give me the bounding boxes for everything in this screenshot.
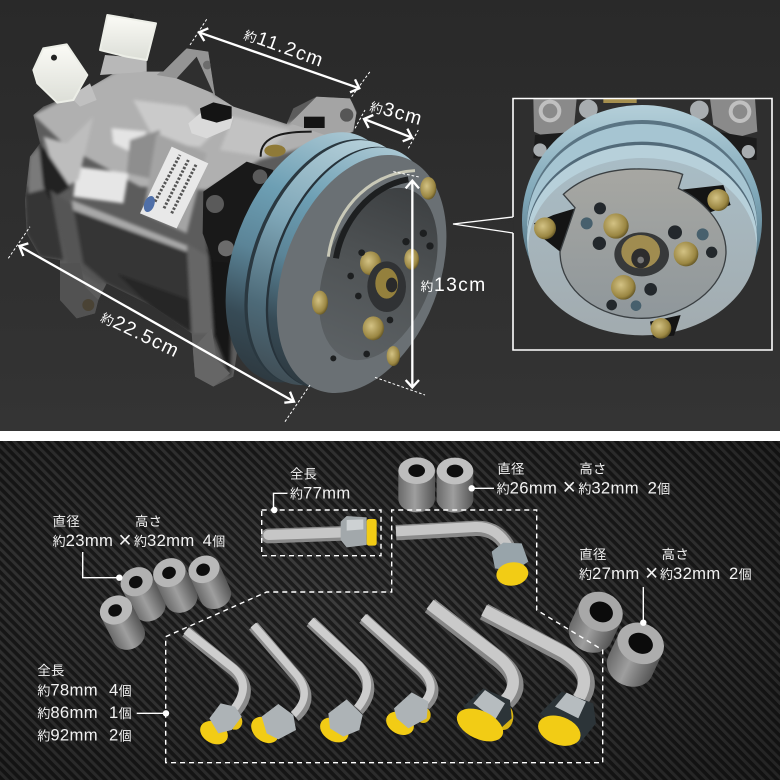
label: sleeves 27mm: 約27mm <box>579 564 640 583</box>
fitting one <box>186 631 245 749</box>
label: sleeves 26mm: 直径 <box>497 458 525 477</box>
brackets <box>533 98 577 138</box>
label: fittings lengths <box>37 660 132 745</box>
bottom carbon panel <box>0 441 780 780</box>
dashed guides <box>8 18 425 422</box>
pulley hub nut <box>367 261 406 312</box>
bent fittings 78 to 92mm <box>186 621 368 749</box>
fitting four <box>363 617 432 740</box>
pulley face <box>245 131 478 417</box>
oil plug <box>188 113 233 138</box>
label: fittings lengths: 2個 <box>109 726 132 745</box>
label: sleeves 27mm: × <box>645 559 658 585</box>
label: sleeves 27mm: 2個 <box>729 564 752 583</box>
mounting foot right <box>192 328 230 387</box>
label: sleeves 26mm: 2個 <box>648 478 670 497</box>
leader lines and dots <box>83 485 646 716</box>
label: fittings lengths: 約92mm <box>37 726 98 745</box>
label: sleeves 26mm: × <box>563 474 576 500</box>
holes <box>581 202 717 311</box>
label: sleeves 27mm <box>579 544 752 585</box>
bent fitting upper <box>396 527 530 588</box>
label: 11.2cm: 約11.2cm <box>241 24 327 72</box>
black notches <box>534 208 575 252</box>
flange <box>528 158 756 335</box>
label: 22.5cm: 約22.5cm <box>97 306 183 362</box>
spec label <box>140 147 208 228</box>
gold rivets <box>534 189 729 339</box>
fitting six <box>484 610 596 751</box>
label: sleeves 23mm: 約23mm <box>53 531 113 550</box>
mounting foot left <box>60 263 98 318</box>
label: sleeves 23mm <box>53 511 225 552</box>
label: sleeves 23mm: 直径 <box>53 511 80 530</box>
arrow: length 22.5cm <box>19 243 294 403</box>
lower panel labels right <box>497 458 752 585</box>
label: sleeves 27mm: 直径 <box>579 544 607 563</box>
fitting five <box>430 604 515 748</box>
fitting three <box>311 621 368 747</box>
connector and wire <box>261 132 312 157</box>
mounting bracket right <box>290 97 357 137</box>
pulley groove two <box>234 123 463 411</box>
label: sleeves 23mm: 約32mm <box>134 531 195 550</box>
label: sleeves 26mm <box>497 458 670 500</box>
small sleeves 23mm <box>95 551 236 655</box>
inset frame <box>513 98 772 350</box>
label: sleeves 23mm: × <box>118 526 132 552</box>
detail inset: clutch face <box>522 99 762 339</box>
dimension labels <box>97 24 487 362</box>
front column <box>187 243 213 333</box>
central hub <box>614 232 669 276</box>
label: sleeves 27mm: 約32mm <box>660 564 721 583</box>
label: sleeves 27mm: 高さ <box>662 544 689 563</box>
label: fittings lengths: 約78mm <box>37 681 98 700</box>
medium sleeves 26mm <box>398 457 473 513</box>
label: sleeves 26mm: 約26mm <box>497 478 557 497</box>
inset background <box>513 98 772 348</box>
label: sleeves 26mm: 約32mm <box>578 478 639 497</box>
label: fittings lengths: 全長 <box>37 660 65 679</box>
pointer to detail inset <box>453 217 513 233</box>
service port caps <box>100 55 147 75</box>
top panel background <box>0 0 780 431</box>
label: fittings lengths: 4個 <box>109 681 132 700</box>
front plate <box>296 171 460 377</box>
label: 13cm: 約13cm <box>421 275 487 296</box>
compressor photo illustration <box>8 13 478 422</box>
lower dark side <box>74 211 190 302</box>
label: fittings lengths: 1個 <box>109 703 132 722</box>
pulley outer <box>522 105 762 261</box>
upper silver surface <box>33 50 353 190</box>
label: fitting 77mm: 約77mm <box>290 483 351 502</box>
cream clutch ring <box>328 171 415 258</box>
label: sleeves 23mm: 4個 <box>203 531 225 550</box>
label: 3cm: 約3cm <box>368 95 425 130</box>
groove rings <box>527 120 757 222</box>
rear housing <box>25 187 63 260</box>
label: fitting 77mm <box>290 463 351 502</box>
lower panel labels left <box>37 463 351 745</box>
label: sleeves 26mm: 高さ <box>579 458 607 477</box>
compressor body <box>20 43 367 390</box>
pulley rear ring <box>193 108 431 407</box>
arrow: pulley 3cm <box>364 115 412 141</box>
dimension arrows <box>19 28 419 403</box>
dashed outlines grouping fittings <box>166 510 603 763</box>
bent fittings large <box>363 604 596 751</box>
arrow: height 13cm <box>406 181 419 387</box>
fitting two <box>246 625 306 749</box>
pulley groove one <box>212 115 445 408</box>
mounting bracket top <box>157 48 215 95</box>
arrow: width 11.2cm <box>199 28 359 92</box>
label: fittings lengths: 約86mm <box>37 703 98 722</box>
clutch mounting rivets <box>312 177 436 366</box>
label: sleeves 23mm: 高さ <box>135 511 162 530</box>
plate holes <box>330 230 434 361</box>
straight fitting 77mm <box>268 516 377 547</box>
large sleeves 27mm <box>562 585 671 694</box>
front plate <box>560 169 726 318</box>
label: fitting 77mm: 全長 <box>290 463 317 482</box>
black front casting <box>203 162 273 263</box>
bright chrome panels <box>112 128 147 153</box>
